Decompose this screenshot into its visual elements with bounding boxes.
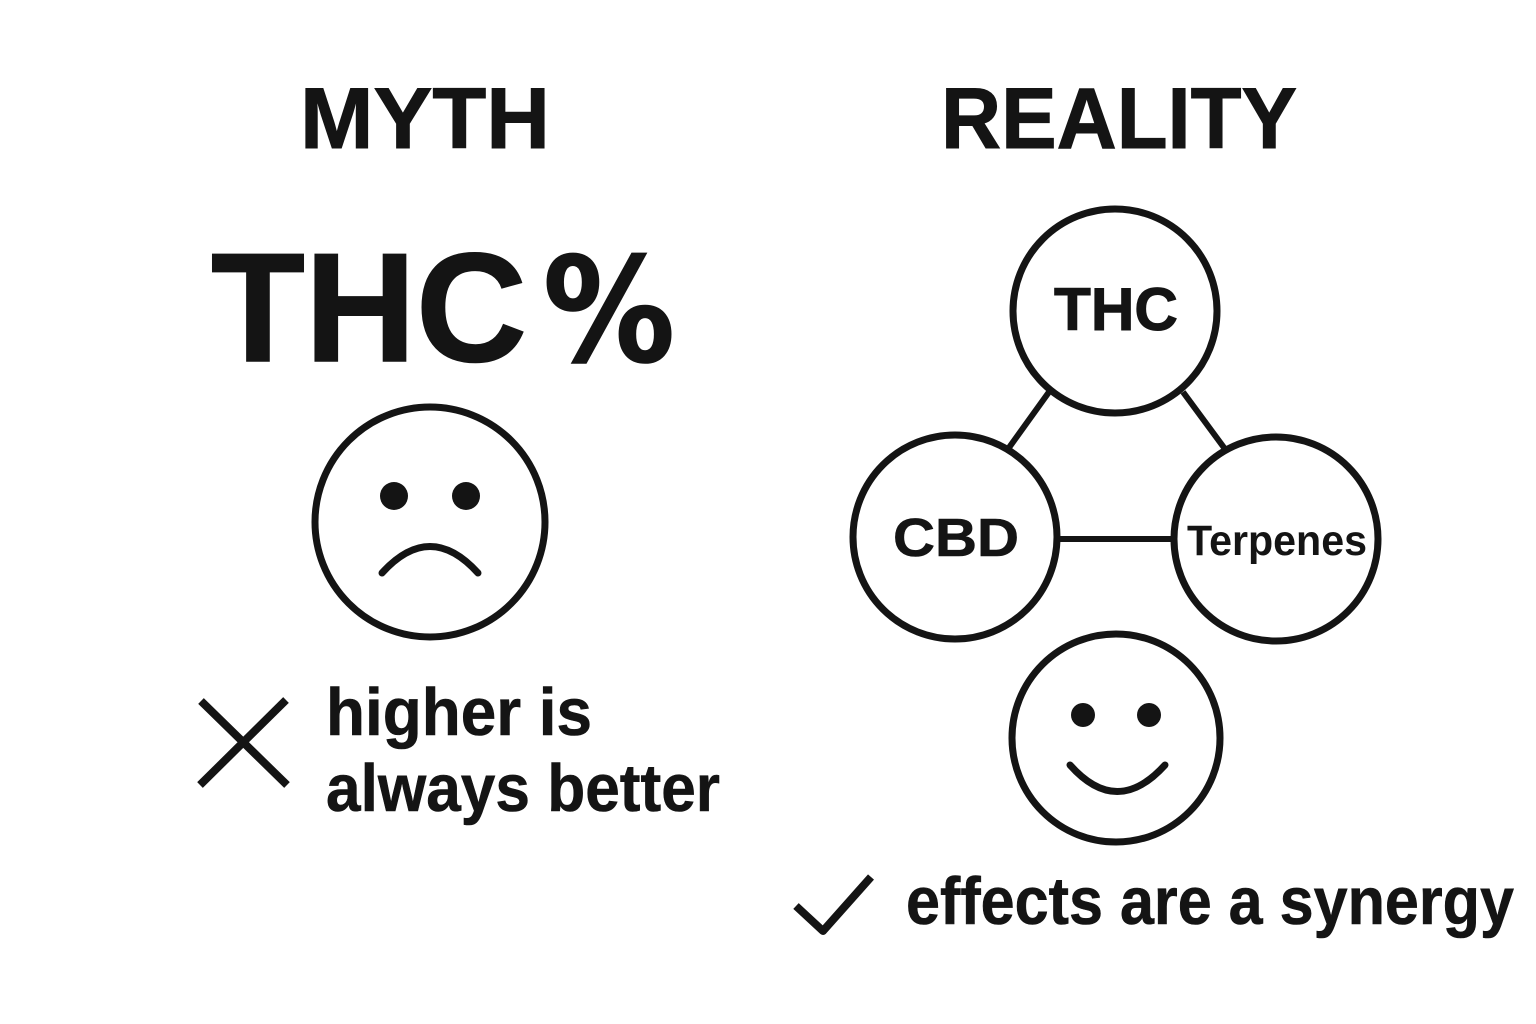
node: Terpenes (1174, 437, 1378, 641)
connector lines (1008, 392, 1225, 539)
icon: cross mark (200, 700, 287, 785)
icon: check mark (796, 877, 871, 931)
text: higher is always better: higher is (326, 675, 592, 750)
icon: sad face (315, 407, 545, 637)
text: higher is always better: always better (326, 751, 720, 826)
node: CBD: CBD (893, 508, 1019, 568)
node: Terpenes: Terpenes (1187, 517, 1367, 565)
icon: happy face (1012, 634, 1220, 842)
big label: THC percent: % (543, 227, 675, 396)
diagram: synergy network (853, 209, 1378, 641)
node: CBD (853, 435, 1057, 639)
node: THC: THC (1054, 276, 1178, 343)
big label: THC percent (211, 221, 675, 396)
big label: THC percent: THC (211, 221, 527, 394)
heading: myth: MYTH (300, 71, 550, 167)
heading: reality: REALITY (941, 71, 1297, 167)
text: higher is always better (326, 675, 720, 826)
node: THC (1013, 209, 1217, 413)
